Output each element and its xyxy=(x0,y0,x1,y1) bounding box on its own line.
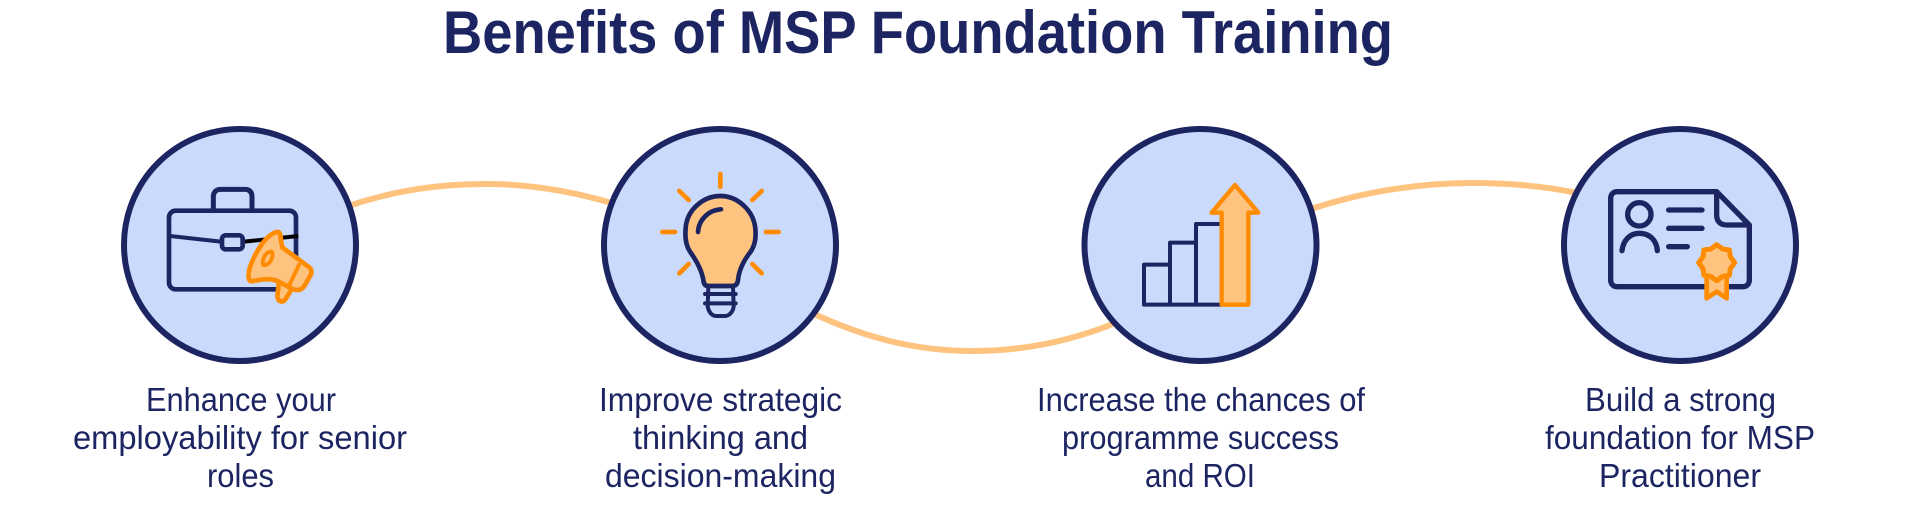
circle 2 xyxy=(604,129,836,361)
label 3: and ROI xyxy=(1145,457,1255,494)
step 4: practitioner foundation xyxy=(1545,129,1815,494)
circle 1 xyxy=(124,129,356,361)
label 1: employability for senior xyxy=(73,419,407,456)
connector curves xyxy=(345,183,1582,351)
label 3 xyxy=(1037,381,1366,494)
step 3: programme success xyxy=(1037,129,1366,494)
label 1: Enhance your xyxy=(146,381,336,418)
label 1: roles xyxy=(207,457,274,494)
step 1: employability xyxy=(73,129,407,494)
label 2: thinking and xyxy=(633,419,808,456)
label 4: Practitioner xyxy=(1599,457,1761,494)
label 2 xyxy=(599,381,842,494)
label 3: programme success xyxy=(1062,419,1339,456)
circle 3 xyxy=(1084,129,1316,361)
icon: briefcase and megaphone xyxy=(169,189,311,302)
icon: light bulb xyxy=(662,174,779,316)
circle 4 xyxy=(1564,129,1796,361)
label 2: Improve strategic xyxy=(599,381,842,418)
label 2: decision-making xyxy=(605,457,836,494)
label 4 xyxy=(1545,381,1815,494)
icon: bar chart with arrow xyxy=(1144,185,1258,305)
icon: certificate with rosette xyxy=(1611,192,1749,298)
title: Benefits of MSP Foundation Training xyxy=(443,0,1393,66)
label 4: foundation for MSP xyxy=(1545,419,1815,456)
step 2: strategic thinking xyxy=(599,129,842,494)
label 3: Increase the chances of xyxy=(1037,381,1366,418)
label 4: Build a strong xyxy=(1585,381,1776,418)
label 1 xyxy=(73,381,407,494)
